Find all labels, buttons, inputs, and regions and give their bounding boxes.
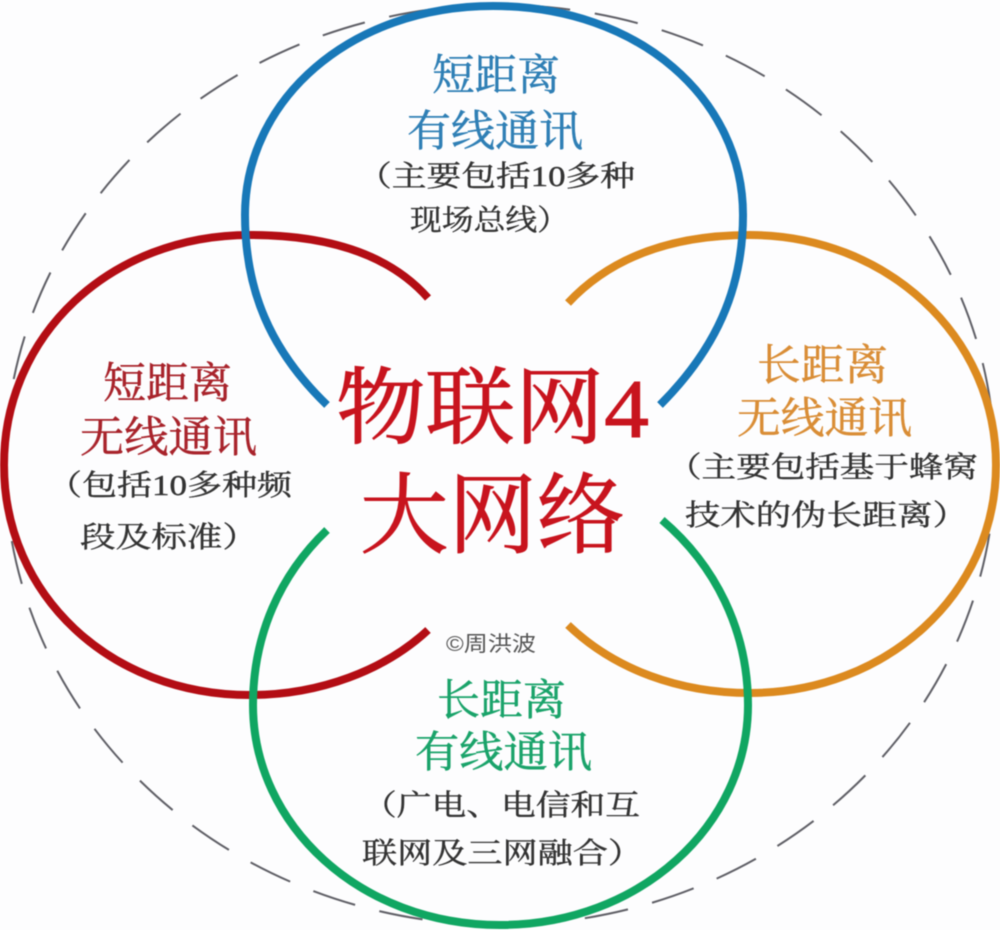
green arc: long-range wired (253, 520, 748, 925)
red arc: short-range wireless (4, 235, 428, 695)
text block: short-range wireless: 段及标准） (80, 521, 258, 554)
text block: long-range wired: 有线通讯 (415, 730, 592, 777)
central title: 物联网4 (336, 363, 649, 456)
text block: short-range wired: 短距离 (432, 53, 560, 100)
text block: long-range wireless (667, 343, 978, 532)
text block: long-range wireless: 长距离 (757, 343, 888, 390)
text block: short-range wireless: （包括10多种频 (47, 469, 293, 502)
text block: short-range wired: 现场总线） (410, 204, 569, 237)
text block: long-range wireless: 无线通讯 (737, 396, 912, 443)
text block: short-range wired: （主要包括10多种 (357, 160, 635, 193)
author credit: ©周洪波 (446, 633, 536, 656)
text block: short-range wired: 有线通讯 (407, 109, 583, 156)
text block: long-range wireless: 技术的伪长距离） (685, 499, 968, 532)
blue arc: short-range wired (245, 6, 743, 405)
text block: short-range wireless (47, 361, 293, 554)
central title (336, 363, 649, 566)
text block: short-range wireless: 短距离 (103, 361, 232, 408)
text block: long-range wired: （广电、电信和互 (362, 789, 640, 822)
text block: long-range wireless: （主要包括基于蜂窝 (667, 451, 978, 484)
text block: short-range wired (357, 53, 635, 237)
text block: long-range wired: 联网及三网融合） (362, 837, 643, 870)
text block: long-range wired: 长距离 (437, 678, 566, 725)
central title: 大网络 (360, 469, 625, 566)
orange arc: long-range wireless (568, 235, 996, 693)
text block: long-range wired (362, 678, 643, 870)
text block: short-range wireless: 无线通讯 (80, 415, 257, 462)
